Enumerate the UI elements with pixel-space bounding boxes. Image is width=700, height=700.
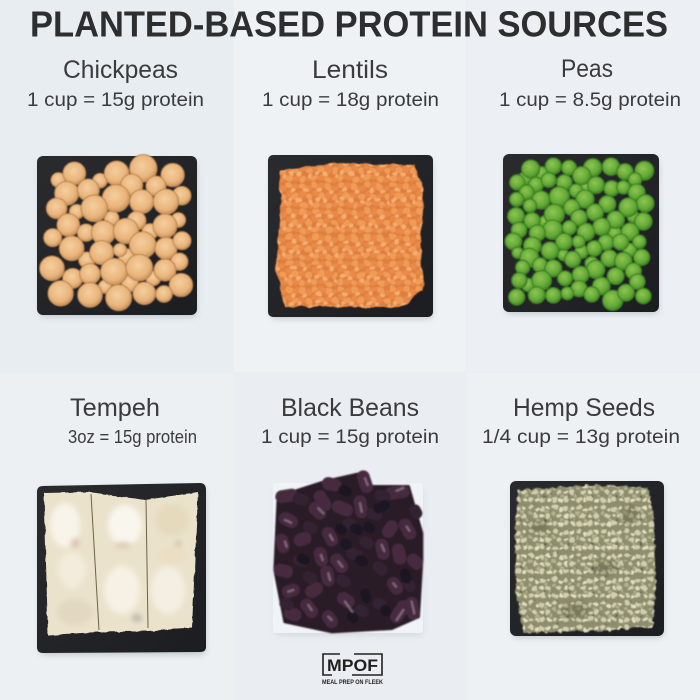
bowl: peas (503, 154, 659, 314)
text: lentils protein: 1 cup = 18g protein (262, 89, 439, 111)
text: peas protein: 1 cup = 8.5g protein (499, 89, 681, 111)
bowl: tempeh (37, 483, 206, 655)
bowl: chickpeas (37, 155, 197, 317)
plate: black beans (273, 473, 423, 636)
heading: tempeh: Tempeh (70, 394, 160, 422)
text: black beans protein: 1 cup = 15g protein (261, 426, 439, 448)
panel: black beans (261, 394, 439, 636)
bowl: hemp seeds (510, 481, 664, 638)
heading: peas: Peas (561, 55, 613, 83)
heading: chickpeas: Chickpeas (63, 56, 178, 84)
heading: black beans: Black Beans (281, 394, 419, 422)
logo: meal prep on fleek: MPOF (327, 656, 378, 675)
bowl: lentils (268, 155, 433, 319)
panel: hemp seeds (482, 394, 680, 638)
logo: meal prep on fleek (322, 654, 383, 686)
heading: hemp seeds: Hemp Seeds (513, 394, 655, 422)
panel: lentils (262, 56, 439, 319)
text: chickpeas protein: 1 cup = 15g protein (27, 89, 204, 111)
text: hemp seeds protein: 1/4 cup = 13g protein (482, 426, 680, 448)
text: tempeh protein: 3oz = 15g protein (68, 426, 197, 447)
heading: lentils: Lentils (312, 56, 388, 84)
title: PLANTED-BASED PROTEIN SOURCES (30, 4, 668, 44)
logo: meal prep on fleek: MEAL PREP ON FLEEK (322, 679, 383, 686)
panel: peas (499, 55, 681, 314)
panel: tempeh (37, 394, 206, 655)
panel: chickpeas (27, 56, 204, 317)
